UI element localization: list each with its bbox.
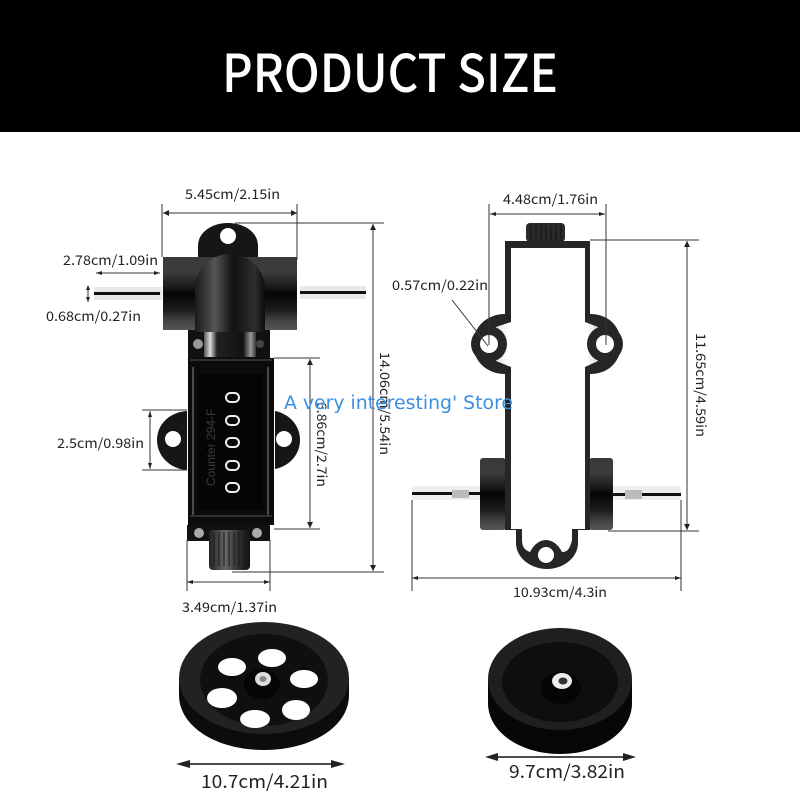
dimension 4.48cm: 4.48cm/1.76in xyxy=(503,188,598,208)
shaft rods xyxy=(412,486,681,500)
bottom bracket xyxy=(187,525,270,541)
side mounting lugs xyxy=(157,411,300,470)
dimension 11.65cm: 11.65cm/4.59in xyxy=(692,333,712,437)
dimension 3.49cm xyxy=(182,540,277,616)
knob xyxy=(209,530,250,570)
header banner xyxy=(0,0,800,132)
dimension 0.57cm leader: 0.57cm/0.22in xyxy=(392,274,488,294)
wheel with holes xyxy=(179,622,349,750)
wheel holes xyxy=(207,649,318,728)
dimension 3.49cm: 3.49cm/1.37in xyxy=(182,596,277,616)
counter model label: Counter 294-F xyxy=(204,409,218,486)
dimension 0.68cm: 0.68cm/0.27in xyxy=(46,305,141,325)
cross tube xyxy=(163,257,297,330)
counter body xyxy=(188,358,274,525)
dimension 6.86cm xyxy=(274,358,333,529)
wheel width label: 10.7cm/4.21in xyxy=(201,768,328,794)
dimension 0.68cm xyxy=(46,285,141,325)
top mounting lug xyxy=(198,223,258,258)
dimension 5.45cm xyxy=(162,183,297,260)
lower bracket and cylinder xyxy=(188,330,270,358)
dimension 14.06cm xyxy=(232,223,396,572)
top knob xyxy=(526,223,565,242)
dimension 0.57cm leader xyxy=(392,274,488,346)
dimension 14.06cm: 14.06cm/5.54in xyxy=(376,352,396,455)
dimensions: front view xyxy=(46,183,396,616)
dimension 10.93cm xyxy=(412,500,681,601)
solid wheel width arrow xyxy=(485,753,636,761)
dimension 2.5cm xyxy=(57,410,187,470)
frame with mounting lugs xyxy=(471,241,623,569)
counter front view xyxy=(94,223,366,570)
dimension 10.93cm: 10.93cm/4.3in xyxy=(513,581,607,601)
dome xyxy=(195,254,265,332)
dimension 4.48cm xyxy=(489,188,606,345)
wheel hub xyxy=(244,669,280,699)
solid wheel width label: 9.7cm/3.82in xyxy=(509,758,625,784)
dimension 2.5cm: 2.5cm/0.98in xyxy=(57,432,144,452)
dimension 2.78cm: 2.78cm/1.09in xyxy=(63,249,158,269)
shaft rods xyxy=(94,286,366,300)
store watermark: A very interesting' Store xyxy=(284,393,513,414)
dimension 11.65cm xyxy=(590,240,712,531)
solid wheel hub xyxy=(541,672,581,704)
side tubes xyxy=(480,458,613,530)
dimensions: back view xyxy=(392,188,712,601)
dimension 5.45cm: 5.45cm/2.15in xyxy=(185,183,280,203)
dimension 6.86cm: 6.86cm/2.7in xyxy=(313,402,333,487)
solid wheel xyxy=(488,628,632,754)
wheel width arrow xyxy=(176,760,345,768)
counter back view xyxy=(412,223,681,569)
counter digits xyxy=(226,393,239,492)
title: PRODUCT SIZE xyxy=(222,32,558,107)
